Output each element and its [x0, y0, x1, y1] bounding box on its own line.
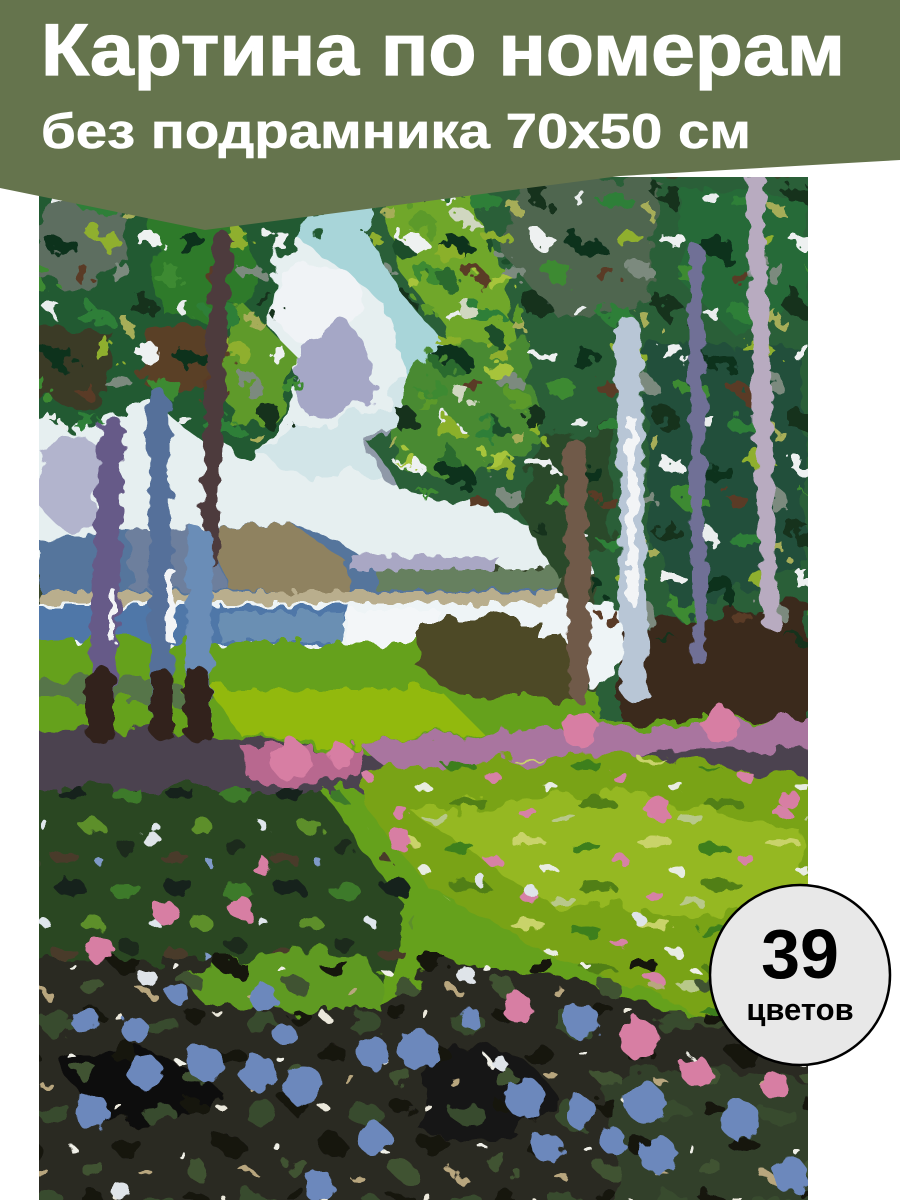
badge: 39 colours	[710, 885, 890, 1065]
canopy right dabs	[370, 170, 810, 640]
far treeline	[39, 522, 560, 606]
sky and clouds	[39, 208, 594, 574]
meadow	[30, 640, 820, 1020]
painting: forest lake landscape	[20, 170, 820, 1200]
birch trunks	[100, 180, 770, 730]
header banner	[0, 0, 900, 230]
lake	[39, 600, 594, 650]
canopy left dabs	[39, 198, 304, 443]
tree canopy right	[370, 170, 820, 720]
badge number: 39	[761, 915, 839, 993]
subtitle: без подрамника 70х50 см	[41, 105, 751, 159]
title: Картина по номерам	[41, 10, 845, 91]
flowers	[71, 707, 808, 1200]
tree canopy left	[39, 196, 324, 461]
lower dark foreground	[30, 949, 820, 1200]
meadow brush texture	[30, 755, 808, 1020]
badge label: цветов	[746, 992, 854, 1027]
